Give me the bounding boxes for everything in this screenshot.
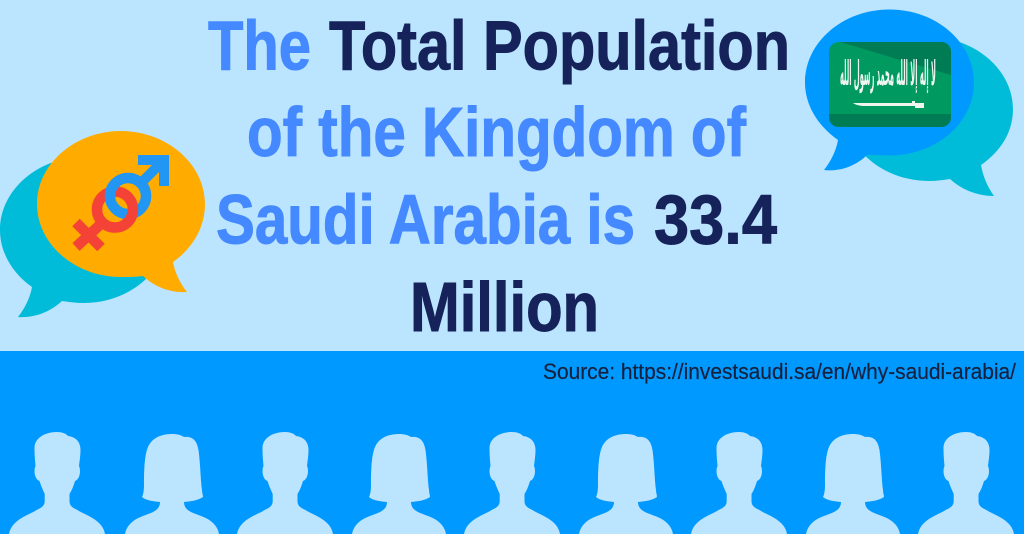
person: female 2 (352, 434, 446, 534)
icon: male symbol (110, 155, 169, 214)
title (208, 6, 790, 346)
title: Million (410, 268, 599, 346)
title: Saudi Arabia is (216, 180, 635, 258)
people silhouettes (9, 432, 1014, 534)
person: male 1 (9, 432, 105, 534)
icon: Saudi flag (829, 42, 951, 127)
person: male 2 (237, 432, 333, 534)
person: female 4 (806, 434, 900, 534)
title: Total Population (329, 6, 790, 84)
person: female 1 (125, 434, 219, 534)
icon: interlocking arc (121, 192, 133, 225)
person: male 4 (691, 432, 787, 534)
title: of the Kingdom of (247, 93, 747, 171)
icon: female symbol (76, 192, 133, 248)
title: The (208, 6, 311, 84)
icon: speech bubbles with gender symbols (0, 131, 205, 317)
title: 33.4 (654, 180, 777, 258)
person: male 3 (464, 432, 560, 534)
icon: speech bubbles with Saudi flag (805, 10, 1013, 196)
person: female 3 (579, 434, 673, 534)
person: male 5 (918, 432, 1014, 534)
lower band (0, 351, 1024, 534)
